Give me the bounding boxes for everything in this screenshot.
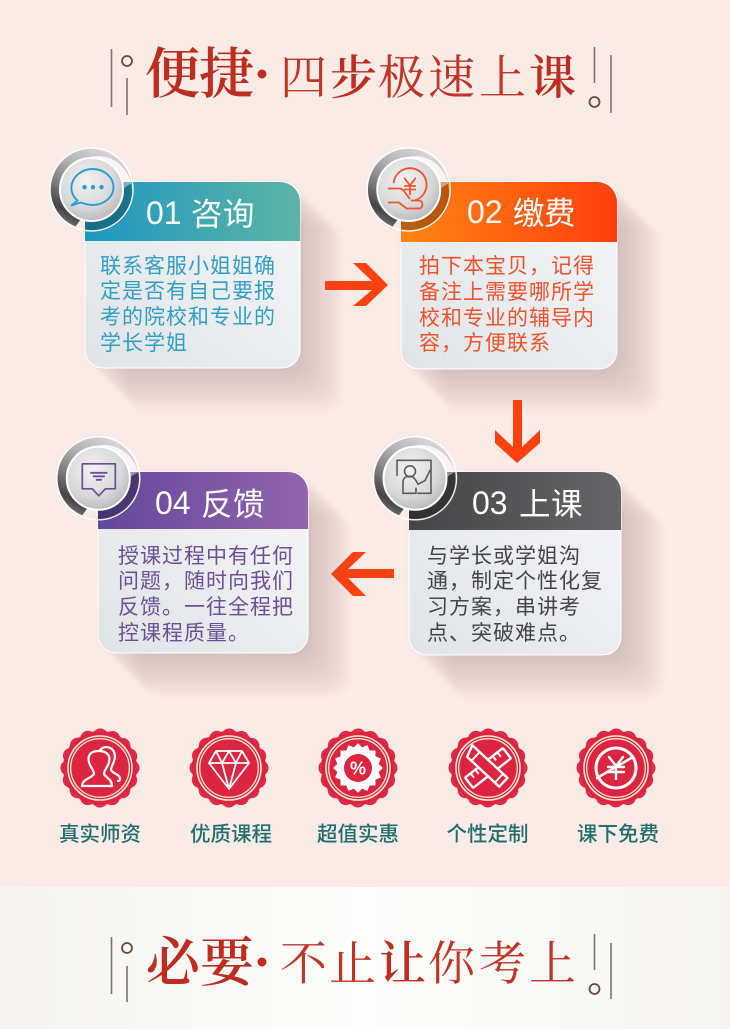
badge: 优质课程 (190, 730, 272, 846)
arrow: 01 to 02 (325, 263, 388, 306)
arrow: 02 to 03 (495, 400, 540, 463)
panel: step 04 feedback (57, 437, 350, 695)
panel: step 03 class: 与学长或学姐沟 (427, 545, 581, 568)
title: 便捷·四步极速上课: 便捷 (145, 44, 254, 105)
icon: feedback bubble (82, 464, 115, 496)
badge: 优质课程: 优质课程 (190, 823, 272, 846)
title: 必要·不止让你考上: 必要 (146, 933, 254, 993)
icon: percent star: % (350, 758, 366, 778)
panel: step 01 consult: 01 (146, 195, 182, 231)
panel: step 01 consult: 咨询 (191, 196, 255, 232)
panel: step 03 class: 习方案，串讲考 (427, 596, 581, 619)
panel: step 03 class: 点、突破难点。 (427, 622, 581, 645)
badge: 个性定制 (446, 730, 528, 846)
title: 必要·不止让你考上: 让 (379, 939, 426, 991)
panel: step 01 consult (50, 148, 342, 410)
icon: hand holding yen (389, 168, 427, 208)
panel: step 04 feedback: 04 (155, 485, 191, 521)
title: 便捷·四步极速上课: 课 (529, 53, 576, 105)
panel: step 02 payment: 校和专业的辅导内 (419, 307, 595, 330)
badge: 个性定制: 个性定制 (446, 823, 528, 846)
panel: step 01 consult: 联系客服小姐姐确 (100, 255, 276, 278)
panel: step 02 payment: 拍下本宝贝，记得 (419, 255, 595, 278)
badge: 超值实惠 (317, 730, 399, 846)
panel: step 01 consult: 考的院校和专业的 (100, 306, 276, 329)
title: 便捷·四步极速上课: 极速上 (378, 53, 526, 105)
badge: 课下免费: 课下免费 (577, 823, 659, 846)
icon: pencil and ruler (464, 745, 511, 788)
badge: 超值实惠: 超值实惠 (317, 823, 399, 846)
icon: diamond (209, 751, 249, 789)
title: 必要·不止让你考上 (112, 933, 611, 1002)
panel: step 02 payment: 备注上需要哪所学 (419, 281, 595, 304)
title: 必要·不止让你考上: 不止 (280, 939, 376, 991)
badge: 课下免费 (577, 730, 659, 846)
badge: 真实师资 (59, 730, 141, 846)
panel: step 02 payment: 02 (467, 194, 503, 230)
icon: no yen (596, 748, 636, 788)
title: 便捷·四步极速上课: 步 (330, 53, 377, 105)
title: 便捷·四步极速上课: 四 (280, 53, 327, 105)
badge: 真实师资: 真实师资 (59, 823, 141, 846)
panel: step 04 feedback: 问题，随时向我们 (118, 570, 294, 593)
icon: teacher at board (397, 460, 431, 493)
panel: step 02 payment (367, 148, 659, 411)
panel: step 03 class (374, 437, 663, 697)
panel: step 01 consult: 学长学姐 (100, 332, 188, 355)
title: 必要·不止让你考上: 你考上 (428, 939, 576, 991)
panel: step 03 class: 03 (472, 485, 508, 521)
panel: bottom white band (0, 887, 730, 1029)
icon: people (82, 747, 120, 786)
arrow: 03 to 04 (331, 552, 394, 596)
panel: step 03 class: 上课 (519, 486, 583, 522)
panel: step 02 payment: 容，方便联系 (419, 332, 551, 355)
panel: step 04 feedback: 授课过程中有任何 (118, 545, 294, 568)
panel: step 04 feedback: 控课程质量。 (118, 622, 250, 645)
panel: step 04 feedback: 反馈 (201, 486, 265, 522)
icon: chat bubble (71, 169, 114, 206)
panel: step 03 class: 通，制定个性化复 (427, 570, 603, 593)
panel: step 02 payment: 缴费 (513, 195, 576, 231)
panel: step 01 consult: 定是否有自己要报 (100, 280, 276, 303)
panel: step 04 feedback: 反馈。一往全程把 (118, 596, 294, 619)
title: 便捷·四步极速上课 (112, 44, 611, 115)
